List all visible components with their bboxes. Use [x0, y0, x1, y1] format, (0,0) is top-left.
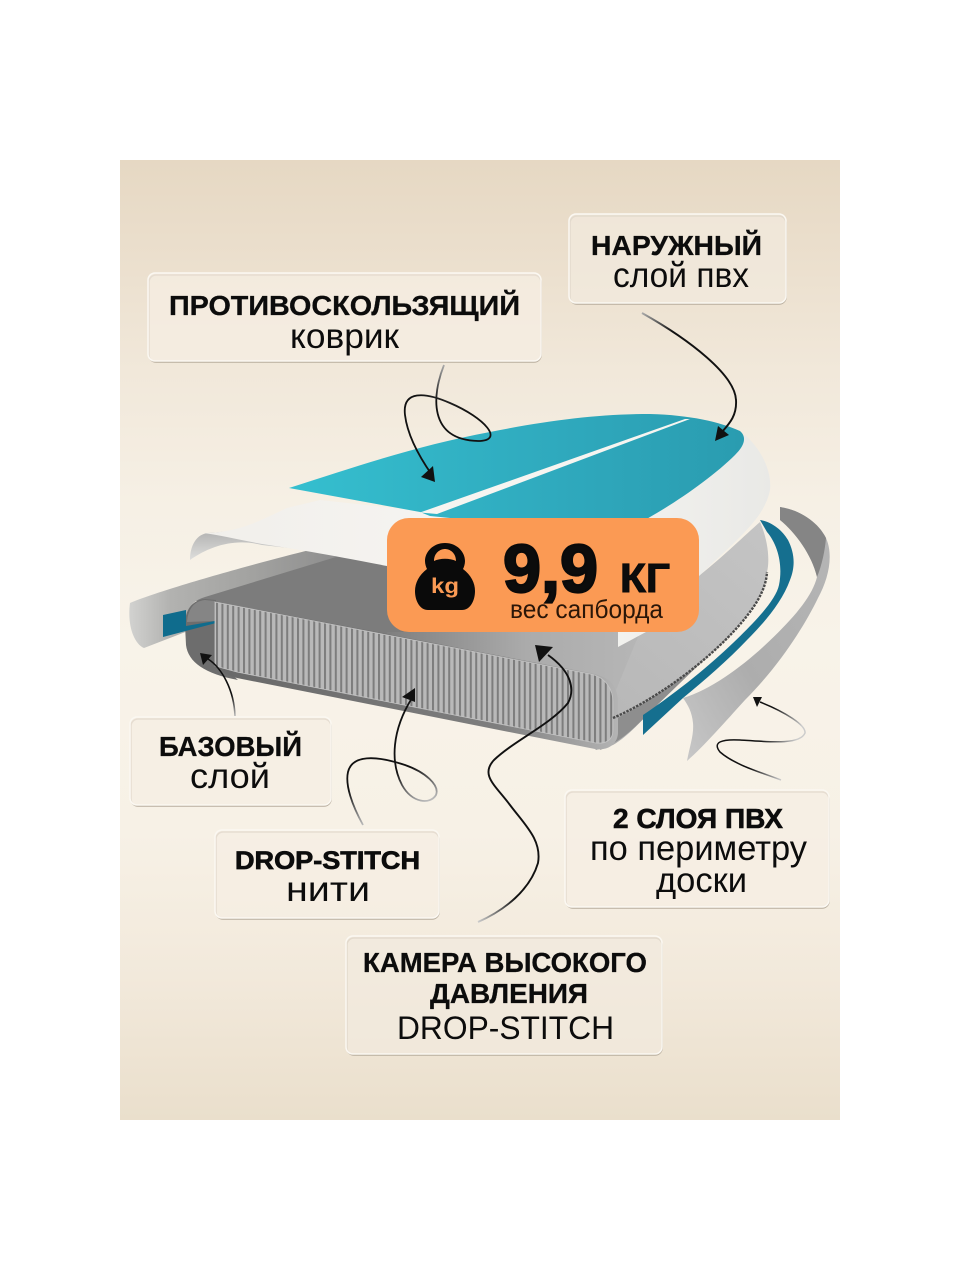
label: base layer: слой [190, 757, 270, 796]
weight badge [387, 518, 699, 632]
outer PVC strip [683, 507, 830, 761]
white board underside curl [190, 508, 390, 565]
arrow: to drop-stitch threads [347, 688, 437, 825]
weight value: 9,9 [503, 531, 598, 607]
body top surface [190, 551, 620, 690]
label: high-pressure chamber: DROP-STITCH [397, 1010, 614, 1046]
label: antislip pad [148, 273, 541, 362]
arrow: to high-pressure chamber [478, 645, 571, 922]
board cross-section illustration [129, 414, 830, 761]
label: antislip pad: ПРОТИВОСКОЛЬЗЯЩИЙ [169, 289, 520, 321]
base layer end cap [185, 599, 238, 680]
label: base layer: БАЗОВЫЙ [159, 730, 302, 762]
label: high-pressure chamber [346, 936, 662, 1055]
label: drop-stitch threads: нити [286, 870, 370, 909]
white PVC top layer [203, 435, 770, 647]
label: outer PVC layer [569, 214, 786, 304]
antislip pad teal deck [289, 414, 744, 535]
label: two PVC layers: доски [656, 861, 747, 900]
label: two PVC layers: 2 СЛОЯ ПВХ [613, 803, 783, 834]
weight unit: КГ [620, 555, 670, 601]
label: drop-stitch threads: DROP-STITCH [235, 847, 420, 875]
left PVC flap [129, 550, 336, 648]
label: outer PVC layer: слой пвх [613, 256, 749, 295]
label: drop-stitch threads [215, 830, 439, 919]
upper end cap highlight [187, 600, 215, 622]
label: antislip pad: коврик [290, 317, 400, 356]
arrow: to antislip pad [405, 365, 491, 482]
icon: kettlebell [415, 543, 475, 610]
teal inner PVC strip [643, 520, 794, 735]
light grey region under badge [387, 632, 640, 690]
panel: beige background [120, 160, 840, 1120]
seam line [613, 572, 767, 718]
arrow: to outer PVC layer [642, 313, 736, 441]
arrow: to two PVC layers [717, 697, 805, 780]
teal strip on left flap [163, 610, 216, 637]
side wall of the chamber [500, 522, 768, 750]
label: two PVC layers [565, 790, 829, 908]
label: high-pressure chamber: КАМЕРА ВЫСОКОГО [363, 947, 647, 978]
side wall lower band below seam [600, 630, 735, 750]
label: base layer [130, 717, 331, 806]
icon: kettlebell: kg [431, 575, 459, 598]
label: two PVC layers: по периметру [590, 829, 807, 868]
weight caption: вес сапборда [510, 594, 664, 624]
label: outer PVC layer: НАРУЖНЫЙ [591, 229, 762, 261]
drop-stitch threads front face [215, 602, 618, 749]
arrow: to base layer [200, 653, 235, 716]
label: high-pressure chamber: ДАВЛЕНИЯ [430, 978, 588, 1009]
